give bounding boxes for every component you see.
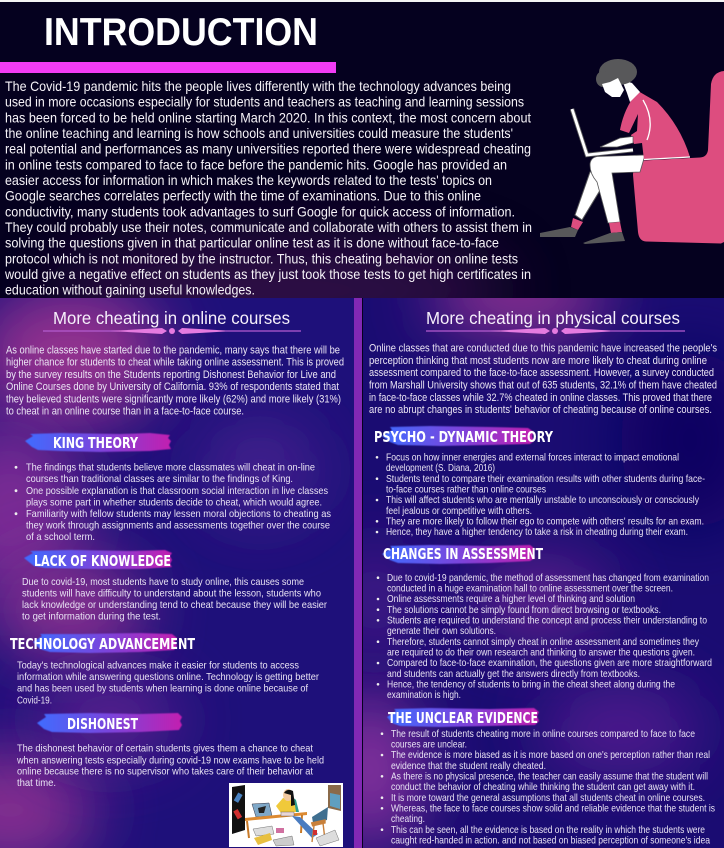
bullet list: Changes in Assessment: examination is high. bbox=[387, 690, 461, 701]
paragraph: Dishonest: when answering tests especially during covid-19 now exams have to be held bbox=[16, 755, 324, 766]
intro paragraph: physical bbox=[369, 342, 717, 416]
intro paragraph: online: to cheat in an online course than in a face-to-face course. bbox=[6, 406, 244, 418]
intro paragraph: online: As online classes have started due to the pandemic, many says that there will be bbox=[6, 344, 340, 356]
introduction text: conductivity, many students took advantages to surf Google for quick access of information. bbox=[5, 204, 515, 219]
heading banner: Technology Advancement: TECHNOLOGY ADVANCEMENT bbox=[10, 635, 195, 653]
intro paragraph: online: they believed students were significantly more likely (62%) and more likely (31%) bbox=[6, 393, 341, 405]
paragraph: Lack of Knowledge: Due to covid-19, most students have to study online, this causes some bbox=[22, 577, 304, 588]
heading banner: Changes in Assessment: CHANGES IN ASSESSMENT bbox=[383, 545, 543, 563]
introduction text: used in more occasions especially for students and teachers as teaching and learning sessions bbox=[5, 95, 524, 110]
introduction text: has been forced to be held online starting March 2020. In this context, the most concern about bbox=[5, 110, 531, 125]
bullet list: Psycho-Dynamic Theory bbox=[376, 452, 705, 538]
introduction text: in online tests compared to face to face before the pandemic hits. Google has provided an bbox=[5, 157, 507, 172]
introduction text: real potential and performances as many universities reported there were widespread cheating bbox=[5, 142, 531, 157]
bullet list: Psycho-Dynamic Theory: Focus on how inner energies and external forces interact to impact emotional bbox=[386, 452, 679, 464]
bullet list: King Theory: Familiarity with fellow students may lessen moral objections to cheating as bbox=[26, 509, 331, 520]
introduction text: Google searches correlates perfectly with the time of examinations. Due to this online bbox=[5, 189, 481, 204]
paragraph: Lack of Knowledge bbox=[22, 577, 328, 623]
title underline bar bbox=[0, 62, 336, 73]
heading banner: Dishonest: DISHONEST bbox=[67, 715, 138, 733]
ornament divider bbox=[426, 328, 685, 334]
illustration: person on armchair with laptop bbox=[540, 59, 724, 244]
header glow bbox=[44, 210, 516, 298]
paragraph: Lack of Knowledge: lack knowledge or understanding tend to cheat because they will be easier bbox=[22, 600, 328, 611]
paragraph: Dishonest: online because there is no supervisor who takes care of their behavior at bbox=[17, 767, 313, 778]
paragraph: Dishonest: that time. bbox=[17, 778, 56, 789]
illustration: student cheating at desk bbox=[229, 783, 343, 847]
introduction text: would give a negative effect on students as they just took those tests to get high certificates in bbox=[4, 267, 531, 282]
column divider bbox=[354, 298, 362, 848]
bullet list: King Theory: One possible explanation is that classroom social interaction in live classes bbox=[26, 486, 328, 497]
panel: more cheating in online courses bbox=[0, 285, 354, 848]
bullet list: Changes in Assessment: Hence, the tendency of students to bring in the cheat sheet along during the bbox=[387, 680, 675, 690]
bullet list: King Theory: The findings that students believe more classmates will cheat in on-line bbox=[26, 462, 315, 474]
intro paragraph: online: higher chance for students to cheat while taking online assessment. This is proved bbox=[6, 356, 344, 368]
introduction text: solving the questions given in that particular online test as it is done without face-to-face bbox=[5, 236, 499, 251]
heading banner: The Unclear Evidence bbox=[387, 708, 539, 727]
heading banner: Lack of Knowledge bbox=[24, 550, 172, 570]
heading banner: Changes in Assessment bbox=[382, 545, 543, 564]
introduction text: easier access for information in which makes the keywords related to the tests' topics on bbox=[5, 173, 492, 188]
left panel background bbox=[0, 285, 354, 848]
introduction text: the online teaching and learning is how schools and universities could measure the students' bbox=[5, 126, 513, 141]
heading banner: Technology Advancement bbox=[10, 633, 195, 653]
paragraph: Technology Advancement: Covid-19. bbox=[17, 695, 52, 706]
heading: online courses: More cheating in online courses bbox=[53, 308, 290, 328]
heading: physical courses: More cheating in physical courses bbox=[426, 308, 680, 328]
bullet list: King Theory: they work through assignments and assessments together over the course bbox=[26, 520, 330, 531]
bullet list: The Unclear Evidence bbox=[381, 729, 715, 846]
heading banner: King Theory: KING THEORY bbox=[53, 434, 139, 452]
introduction text: education without gaining useful knowledges. bbox=[5, 283, 255, 298]
bullet list: Psycho-Dynamic Theory: feel jealous or competitive with others. bbox=[386, 506, 532, 517]
introduction text: They could probably use their notes, communicate and collaborate with others to assist them in bbox=[5, 220, 532, 235]
introduction text: The Covid-19 pandemic hits the people lives differently with the technology advances being bbox=[5, 79, 511, 94]
heading banner: The Unclear Evidence: THE UNCLEAR EVIDENCE bbox=[388, 709, 538, 727]
paragraph: Lack of Knowledge: students will have difficulty to understand about the lesson, students who bbox=[22, 589, 321, 600]
paragraph: Technology Advancement: Today's technological advances make it easier for students to access bbox=[17, 661, 299, 672]
paragraph: Lack of Knowledge: to get information during the test. bbox=[22, 612, 161, 623]
paragraph: Technology Advancement: information while answering questions online. Technology is getting better bbox=[17, 672, 320, 683]
ornament divider bbox=[43, 328, 301, 334]
heading banner: Lack of Knowledge: LACK OF KNOWLEDGE bbox=[34, 552, 171, 570]
bullet list: The Unclear Evidence: courses are unclear. bbox=[391, 740, 467, 750]
bullet list: The Unclear Evidence: evidence that the student really cheated. bbox=[391, 761, 546, 772]
introduction text: protocol which is not monitored by the instructor. Thus, this cheating behavior on online tests bbox=[5, 251, 518, 266]
intro paragraph: online: by the survey results on the Students reporting Dishonest Behavior for Live and bbox=[6, 369, 336, 381]
introduction text bbox=[4, 79, 532, 298]
bullet list: Changes in Assessment: generate their own solutions. bbox=[387, 626, 496, 637]
bullet list: King Theory: courses than traditional classes are similar to the findings of King. bbox=[26, 474, 293, 485]
paragraph: Technology Advancement: and has been used by students when learning is done online because of bbox=[17, 684, 308, 695]
right panel background bbox=[363, 298, 724, 848]
bullet list: The Unclear Evidence: cheating. bbox=[391, 814, 425, 825]
heading banner: Psycho-Dynamic Theory bbox=[374, 426, 554, 446]
bullet list: King Theory: of a school term. bbox=[26, 532, 95, 543]
bullet list: Psycho-Dynamic Theory: development (S. Diana, 2016) bbox=[386, 463, 495, 474]
bullet list: Changes in Assessment: Online assessments require a higher level of thinking and solution bbox=[387, 594, 635, 605]
bullet list: King Theory: plays some part in whether students decide to cheat, which would agree. bbox=[26, 497, 322, 508]
bullet list: Changes in Assessment: conducted in a huge examination hall to online assessment over the screen. bbox=[387, 584, 673, 594]
intro paragraph: online bbox=[6, 344, 344, 418]
panel: introduction header bbox=[0, 18, 724, 298]
bullet list: Psycho-Dynamic Theory: to-face courses rather than online courses bbox=[386, 484, 546, 496]
paragraph: Dishonest: The dishonest behavior of certain students gives them a chance to cheat bbox=[17, 744, 313, 755]
title: INTRODUCTION bbox=[44, 11, 318, 54]
heading banner: Psycho-Dynamic Theory: PSYCHO - DYNAMIC THEORY bbox=[374, 428, 554, 446]
intro paragraph: online: Online Courses done by University of California. 93% of respondents stated that bbox=[6, 381, 339, 393]
panel: more cheating in physical courses bbox=[363, 298, 724, 848]
heading banner: Dishonest bbox=[37, 713, 182, 733]
top white edge bbox=[0, 0, 724, 2]
paragraph: Dishonest bbox=[16, 744, 324, 789]
bullet list: Changes in Assessment: The solutions cannot be simply found from direct browsing or textbooks. bbox=[387, 605, 661, 616]
bullet list: Changes in Assessment: and students can actually get the answers directly from textbooks. bbox=[387, 669, 640, 680]
bullet list: King Theory bbox=[15, 462, 331, 543]
paragraph: Technology Advancement bbox=[17, 661, 320, 706]
bullet list: Changes in Assessment bbox=[377, 573, 712, 701]
